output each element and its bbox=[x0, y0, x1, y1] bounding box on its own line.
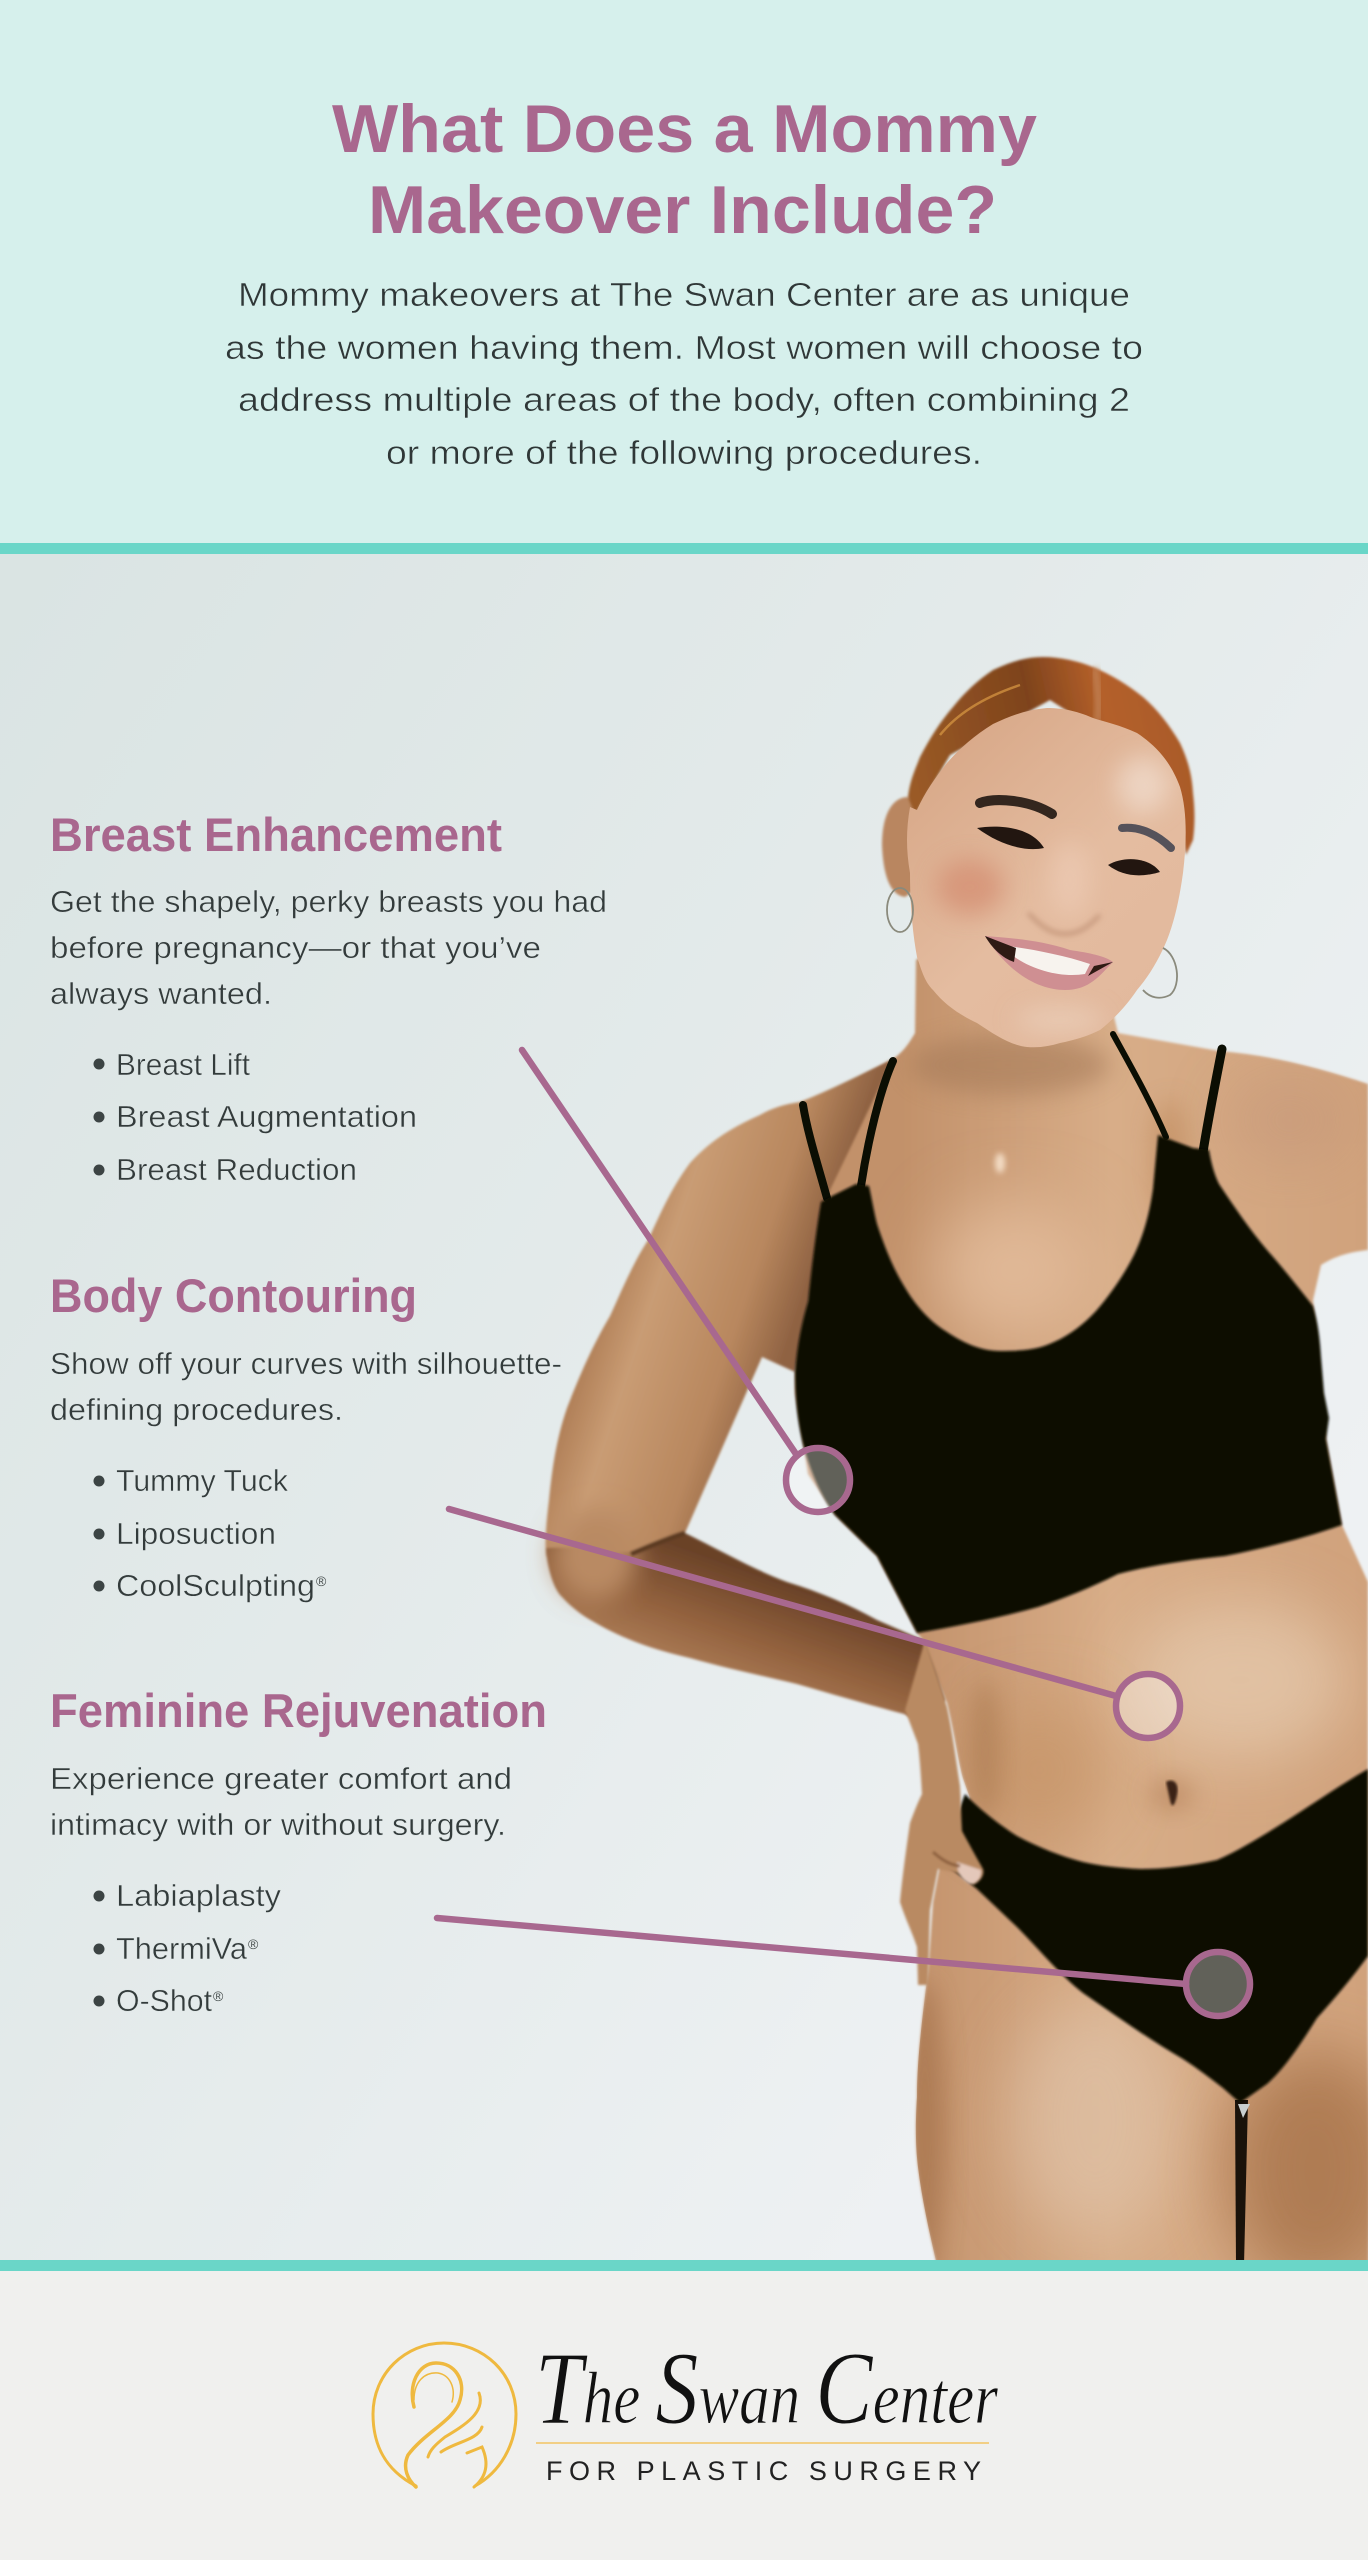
list: body procedures: Tummy Tuck bbox=[116, 1463, 288, 1498]
ear bbox=[882, 797, 915, 897]
torso and legs bbox=[795, 950, 1368, 2290]
logo: swan icon bbox=[373, 2343, 516, 2487]
logo: gold rule bbox=[536, 2442, 989, 2444]
section: feminine rejuvenation: intimacy with or without surgery. bbox=[50, 1807, 506, 1842]
panel: photo background bbox=[0, 554, 1368, 2260]
photo: smiling woman bbox=[546, 657, 1368, 2290]
list: breast procedures: Breast Lift bbox=[116, 1047, 250, 1082]
section: feminine rejuvenation: Experience greater comfort and bbox=[50, 1761, 512, 1796]
title: Makeover Include? bbox=[368, 172, 997, 248]
pointer: feminine rejuvenation bbox=[437, 1918, 1250, 2016]
list: body procedures bbox=[94, 1463, 327, 1603]
section: breast enhancement: before pregnancy—or that you’ve bbox=[50, 930, 541, 965]
list: body procedures: ® bbox=[316, 1573, 327, 1589]
head bbox=[882, 657, 1195, 1060]
section: body contouring: defining procedures. bbox=[50, 1392, 343, 1427]
bikini bottom bbox=[940, 1769, 1368, 2103]
logo: tagline: FOR PLASTIC SURGERY bbox=[546, 2456, 981, 2486]
sports top bbox=[795, 1135, 1342, 1633]
section: breast enhancement bbox=[50, 808, 607, 1187]
left arm bbox=[546, 1059, 945, 1725]
list: breast procedures bbox=[94, 1047, 417, 1187]
pointer: body contouring bbox=[449, 1509, 1180, 1738]
list: body procedures: Liposuction bbox=[116, 1516, 276, 1551]
section: breast enhancement: Breast Enhancement bbox=[50, 808, 502, 861]
mouth bbox=[985, 936, 1113, 990]
section: feminine rejuvenation bbox=[50, 1684, 547, 2018]
navel bbox=[1150, 1779, 1194, 1811]
hand on hip bbox=[900, 1640, 983, 1985]
intro text: address multiple areas of the body, often combining 2 bbox=[238, 381, 1130, 418]
section: body contouring bbox=[50, 1269, 562, 1603]
pointer: breast enhancement bbox=[522, 1050, 850, 1512]
eyebrows bbox=[980, 800, 1171, 848]
section: breast enhancement: always wanted. bbox=[50, 976, 272, 1011]
title bbox=[332, 91, 1037, 248]
list: feminine procedures: ThermiVa bbox=[116, 1931, 248, 1966]
list: breast procedures: Breast Reduction bbox=[116, 1152, 357, 1187]
list: feminine procedures: ® bbox=[248, 1936, 259, 1952]
inner thigh gap bbox=[1235, 2100, 1248, 2265]
intro text: as the women having them. Most women will choose to bbox=[225, 329, 1143, 366]
list: feminine procedures: Labiaplasty bbox=[116, 1878, 282, 1913]
panel: header bbox=[0, 0, 1368, 543]
intro text bbox=[225, 276, 1143, 471]
list: feminine procedures bbox=[94, 1878, 282, 2018]
list: body procedures: CoolSculpting bbox=[116, 1568, 315, 1603]
section: feminine rejuvenation: Feminine Rejuvenation bbox=[50, 1684, 547, 1737]
logo: wordmark: The Swan Center bbox=[535, 2331, 999, 2446]
panel: footer bbox=[0, 2271, 1368, 2560]
face bbox=[895, 700, 1195, 1060]
list: feminine procedures: O-Shot bbox=[116, 1983, 212, 2018]
section: breast enhancement: Get the shapely, perky breasts you had bbox=[50, 884, 607, 919]
title: What Does a Mommy bbox=[332, 91, 1037, 167]
eyes bbox=[977, 827, 1160, 875]
hair bbox=[908, 657, 1194, 855]
intro text: or more of the following procedures. bbox=[386, 434, 982, 471]
section: body contouring: Show off your curves with silhouette- bbox=[50, 1346, 562, 1381]
intro text: Mommy makeovers at The Swan Center are as unique bbox=[238, 276, 1130, 313]
section: body contouring: Body Contouring bbox=[50, 1269, 417, 1322]
list: breast procedures: Breast Augmentation bbox=[116, 1099, 417, 1134]
nose bbox=[1028, 913, 1100, 934]
list: feminine procedures: ® bbox=[213, 1988, 224, 2004]
teal divider bars bbox=[0, 543, 1368, 2271]
sports top straps bbox=[803, 1061, 893, 1198]
earrings bbox=[887, 888, 1177, 998]
